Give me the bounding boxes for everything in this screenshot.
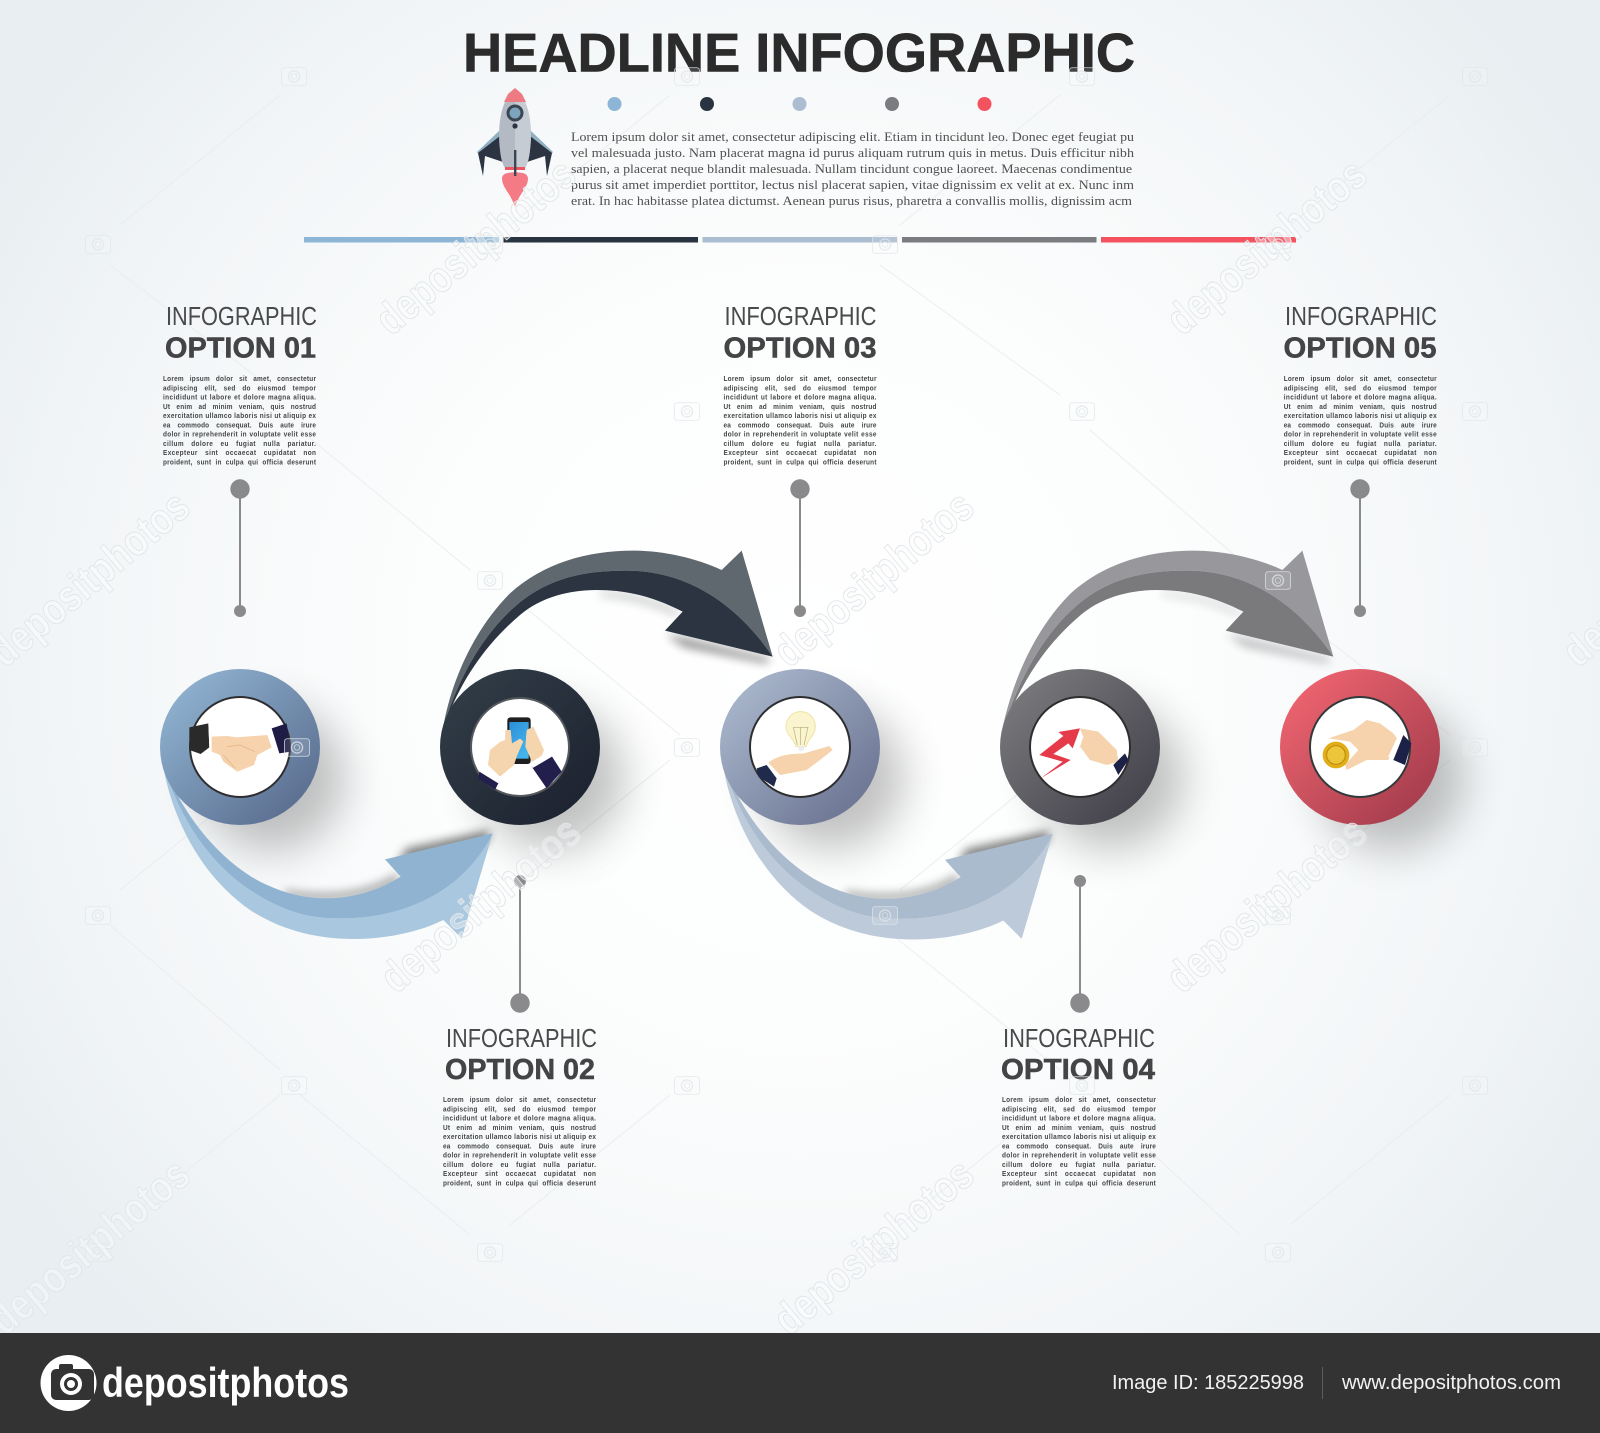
watermark text: depositphotos [371,807,590,1002]
text block: option 02: adipiscing elit, sed do eiusmod tempor [443,1106,596,1113]
text block: option 01: Excepteur sint occaecat cupidatat non [163,450,316,457]
text block: option 04: Excepteur sint occaecat cupidatat non [1002,1171,1156,1178]
text block: option 01: exercitation ullamco laboris nisi ut aliquip ex [163,413,316,420]
watermark text: depositphotos [1157,149,1376,344]
title: HEADLINE INFOGRAPHIC [463,22,1135,84]
text block: option 03: INFOGRAPHIC [724,301,876,331]
text block: option 04: cillum dolore eu fugiat nulla pariatur. [1002,1161,1156,1169]
text block: option 04 [1001,1023,1156,1187]
legend dots [608,97,992,111]
text block: option 04: proident, sunt in culpa qui officia deserunt [1002,1180,1156,1187]
icon: rocket [477,88,553,207]
text block: option 01: Lorem ipsum dolor sit amet, consectetur [163,376,316,383]
arrow 1: blue, option 01 to 02 [163,763,493,939]
watermark text: depositphotos [764,1149,983,1344]
icon: hand with light bulb [757,712,833,787]
text block: option 04: incididunt ut labore et dolore magna aliqua. [1002,1115,1156,1123]
text block: option 02: exercitation ullamco laboris nisi ut aliquip ex [443,1134,596,1141]
node 3: idea bulb [720,669,880,825]
arrow 4: grey, option 04 to 05 [1001,551,1333,737]
connector pin: option 01 [230,479,250,617]
text block: option 03: cillum dolore eu fugiat nulla pariatur. [724,440,877,448]
text block: option 05: Ut enim ad minim veniam, quis nostrud [1284,403,1437,411]
text block: option 04: Ut enim ad minim veniam, quis nostrud [1002,1124,1156,1132]
website url: www.depositphotos.com [1341,1372,1561,1394]
text block: option 03: ea commodo consequat. Duis aute irure [724,422,877,429]
text block: option 05: incididunt ut labore et dolore magna aliqua. [1284,394,1437,402]
text block: option 05: exercitation ullamco laboris nisi ut aliquip ex [1284,413,1437,420]
text block: option 04: OPTION 04 [1001,1054,1155,1086]
arrow 2: dark, option 02 to 03 [443,551,773,730]
icon: hand holding coin [1323,720,1411,770]
node 5: coin [1280,669,1440,825]
node 2: phone [440,669,600,825]
text block: option 05: Excepteur sint occaecat cupidatat non [1284,450,1437,457]
text block: option 02: OPTION 02 [445,1054,595,1086]
text block: option 05: proident, sunt in culpa qui officia deserunt [1284,459,1437,466]
text block: option 04: adipiscing elit, sed do eiusmod tempor [1002,1106,1156,1113]
connector pin: option 05 [1350,479,1370,617]
arrow 3: grey-blue, option 03 to 04 [723,764,1053,939]
text block: option 01: Ut enim ad minim veniam, quis nostrud [163,403,316,411]
text block: option 03: incididunt ut labore et dolore magna aliqua. [724,394,877,402]
colour divider bar [304,237,1296,242]
connector pin: option 02 [510,875,530,1013]
text block: option 04: dolor in reprehenderit in voluptate velit esse [1002,1152,1156,1160]
text block: option 02: Excepteur sint occaecat cupidatat non [443,1171,596,1178]
text block: option 03: dolor in reprehenderit in voluptate velit esse [724,431,877,439]
text block: option 02: INFOGRAPHIC [446,1023,597,1053]
watermark text: depositphotos [366,149,585,344]
text block: option 02: dolor in reprehenderit in voluptate velit esse [443,1152,596,1160]
text block: option 03: Ut enim ad minim veniam, quis nostrud [724,403,877,411]
intro paragraph: sapien, a placerat neque blandit malesuada. Nullam tincidunt congue laoreet. Maecenas condimentue [571,162,1132,176]
text block: option 03: Excepteur sint occaecat cupidatat non [724,450,877,457]
text block: option 01: ea commodo consequat. Duis aute irure [163,422,316,429]
text block: option 05: cillum dolore eu fugiat nulla pariatur. [1284,440,1437,448]
text block: option 04: ea commodo consequat. Duis aute irure [1002,1143,1156,1150]
text block: option 02: cillum dolore eu fugiat nulla pariatur. [443,1161,596,1169]
text block: option 05: ea commodo consequat. Duis aute irure [1284,422,1437,429]
image id: Image ID: 185225998 [1112,1372,1304,1394]
icon: hand placing red arrow [1039,728,1128,778]
watermark text: depositphotos [1157,807,1376,1002]
connector pin: option 03 [790,479,810,617]
node 1: handshake [160,669,320,825]
text block: option 02: Lorem ipsum dolor sit amet, consectetur [443,1097,596,1104]
text block: option 02 [443,1023,597,1187]
text block: option 01: dolor in reprehenderit in voluptate velit esse [163,431,316,439]
ring shadows [200,706,1464,850]
text block: option 05: adipiscing elit, sed do eiusmod tempor [1284,385,1437,392]
intro paragraph [571,130,1135,208]
text block: option 02: incididunt ut labore et dolore magna aliqua. [443,1115,596,1123]
watermark text: depositphotos [764,481,983,676]
text block: option 01: proident, sunt in culpa qui officia deserunt [163,459,317,466]
text block: option 02: proident, sunt in culpa qui officia deserunt [443,1180,597,1187]
text block: option 04: exercitation ullamco laboris nisi ut aliquip ex [1002,1134,1156,1141]
text block: option 03 [724,301,877,466]
text block: option 03: proident, sunt in culpa qui officia deserunt [724,459,877,466]
text block: option 01: OPTION 01 [165,332,316,364]
text block: option 03: exercitation ullamco laboris nisi ut aliquip ex [724,413,877,420]
logo wordmark: depositphotos [102,1359,349,1406]
text block: option 02: Ut enim ad minim veniam, quis nostrud [443,1124,596,1132]
text block: option 01: incididunt ut labore et dolore magna aliqua. [163,394,316,402]
intro paragraph: Lorem ipsum dolor sit amet, consectetur adipiscing elit. Etiam in tincidunt leo. Donec eget feugiat pu [571,130,1135,144]
text block: option 05 [1284,301,1437,466]
watermark camera icons [85,68,1488,1261]
text block: option 05: INFOGRAPHIC [1285,301,1437,331]
text block: option 05: dolor in reprehenderit in voluptate velit esse [1284,431,1437,439]
intro paragraph: erat. In hac habitasse platea dictumst. Aenean purus risus, pharetra a convallis mollis, dignissim acm [571,194,1132,208]
text block: option 01: cillum dolore eu fugiat nulla pariatur. [163,440,316,448]
text block: option 03: OPTION 03 [724,332,876,364]
text block: option 01 [163,301,317,466]
text block: option 02: ea commodo consequat. Duis aute irure [443,1143,596,1150]
footer banner [0,1333,1600,1433]
text block: option 05: OPTION 05 [1284,332,1436,364]
text block: option 05: Lorem ipsum dolor sit amet, consectetur [1284,376,1437,383]
text block: option 01: adipiscing elit, sed do eiusmod tempor [163,385,316,392]
icon: handshake [189,723,291,772]
connector pin: option 04 [1070,875,1090,1013]
text block: option 04: Lorem ipsum dolor sit amet, consectetur [1002,1097,1156,1104]
text block: option 04: INFOGRAPHIC [1003,1023,1155,1053]
node 4: growth arrow [1000,669,1160,825]
text block: option 01: INFOGRAPHIC [166,301,317,331]
icon: hands holding phone [478,717,562,790]
icon: depositphotos camera logo [40,1355,96,1411]
intro paragraph: vel malesuada justo. Nam placerat magna id purus aliquam rutrum quis in metus. Duis efficitur nibh [571,146,1135,160]
text block: option 03: adipiscing elit, sed do eiusmod tempor [724,385,877,392]
intro paragraph: purus sit amet imperdiet porttitor, lectus nisl placerat sapien, vitae dignissim ex velit at ex. Nunc inm [571,178,1134,192]
text block: option 03: Lorem ipsum dolor sit amet, consectetur [724,376,877,383]
